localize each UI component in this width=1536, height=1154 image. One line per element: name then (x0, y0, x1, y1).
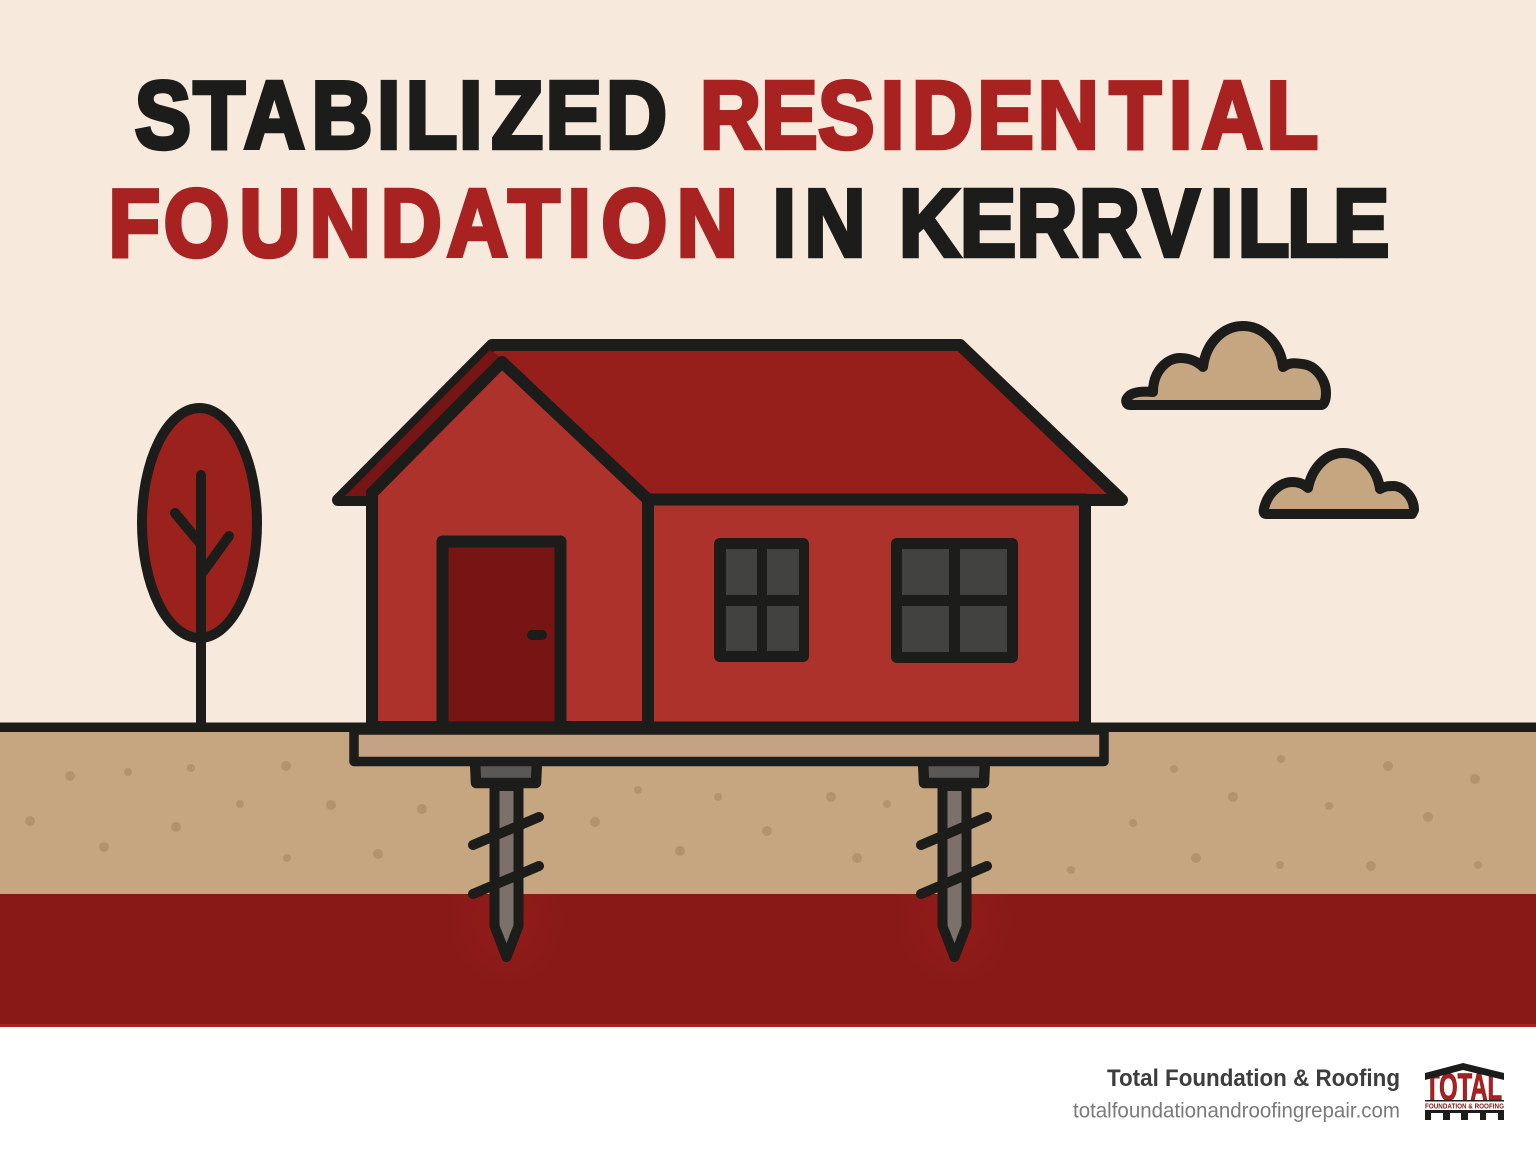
title: IN (772, 170, 866, 277)
title: RESIDENTIAL (700, 62, 1318, 169)
ground line (0, 722, 1536, 732)
title: FOUNDATION (109, 170, 738, 277)
main roof (338, 345, 1122, 500)
right wall (648, 500, 1085, 728)
window small (714, 538, 809, 662)
helical pier right (921, 760, 987, 957)
panel: bedrock layer (0, 894, 1536, 1027)
door (442, 542, 560, 728)
logo (1425, 1063, 1504, 1120)
panel: soil layer (0, 727, 1536, 894)
front gable wall (372, 362, 648, 727)
roof edge sliver (345, 350, 510, 496)
helical pier left (473, 760, 539, 957)
foundation slab (354, 730, 1104, 762)
title (109, 62, 1389, 277)
icon: cloud large (1126, 326, 1326, 405)
window large (891, 538, 1018, 663)
footer company name: Total Foundation & Roofing (1107, 1065, 1400, 1092)
footer website: totalfoundationandroofingrepair.com (1073, 1100, 1400, 1122)
title: STABILIZED (135, 62, 667, 169)
logo: FOUNDATION & ROOFING (1425, 1102, 1504, 1110)
icon: tree (142, 408, 257, 726)
house (338, 345, 1122, 728)
title: KERRVILLE (899, 170, 1389, 277)
soil speckles (25, 755, 1482, 874)
icon: cloud small (1264, 453, 1414, 514)
